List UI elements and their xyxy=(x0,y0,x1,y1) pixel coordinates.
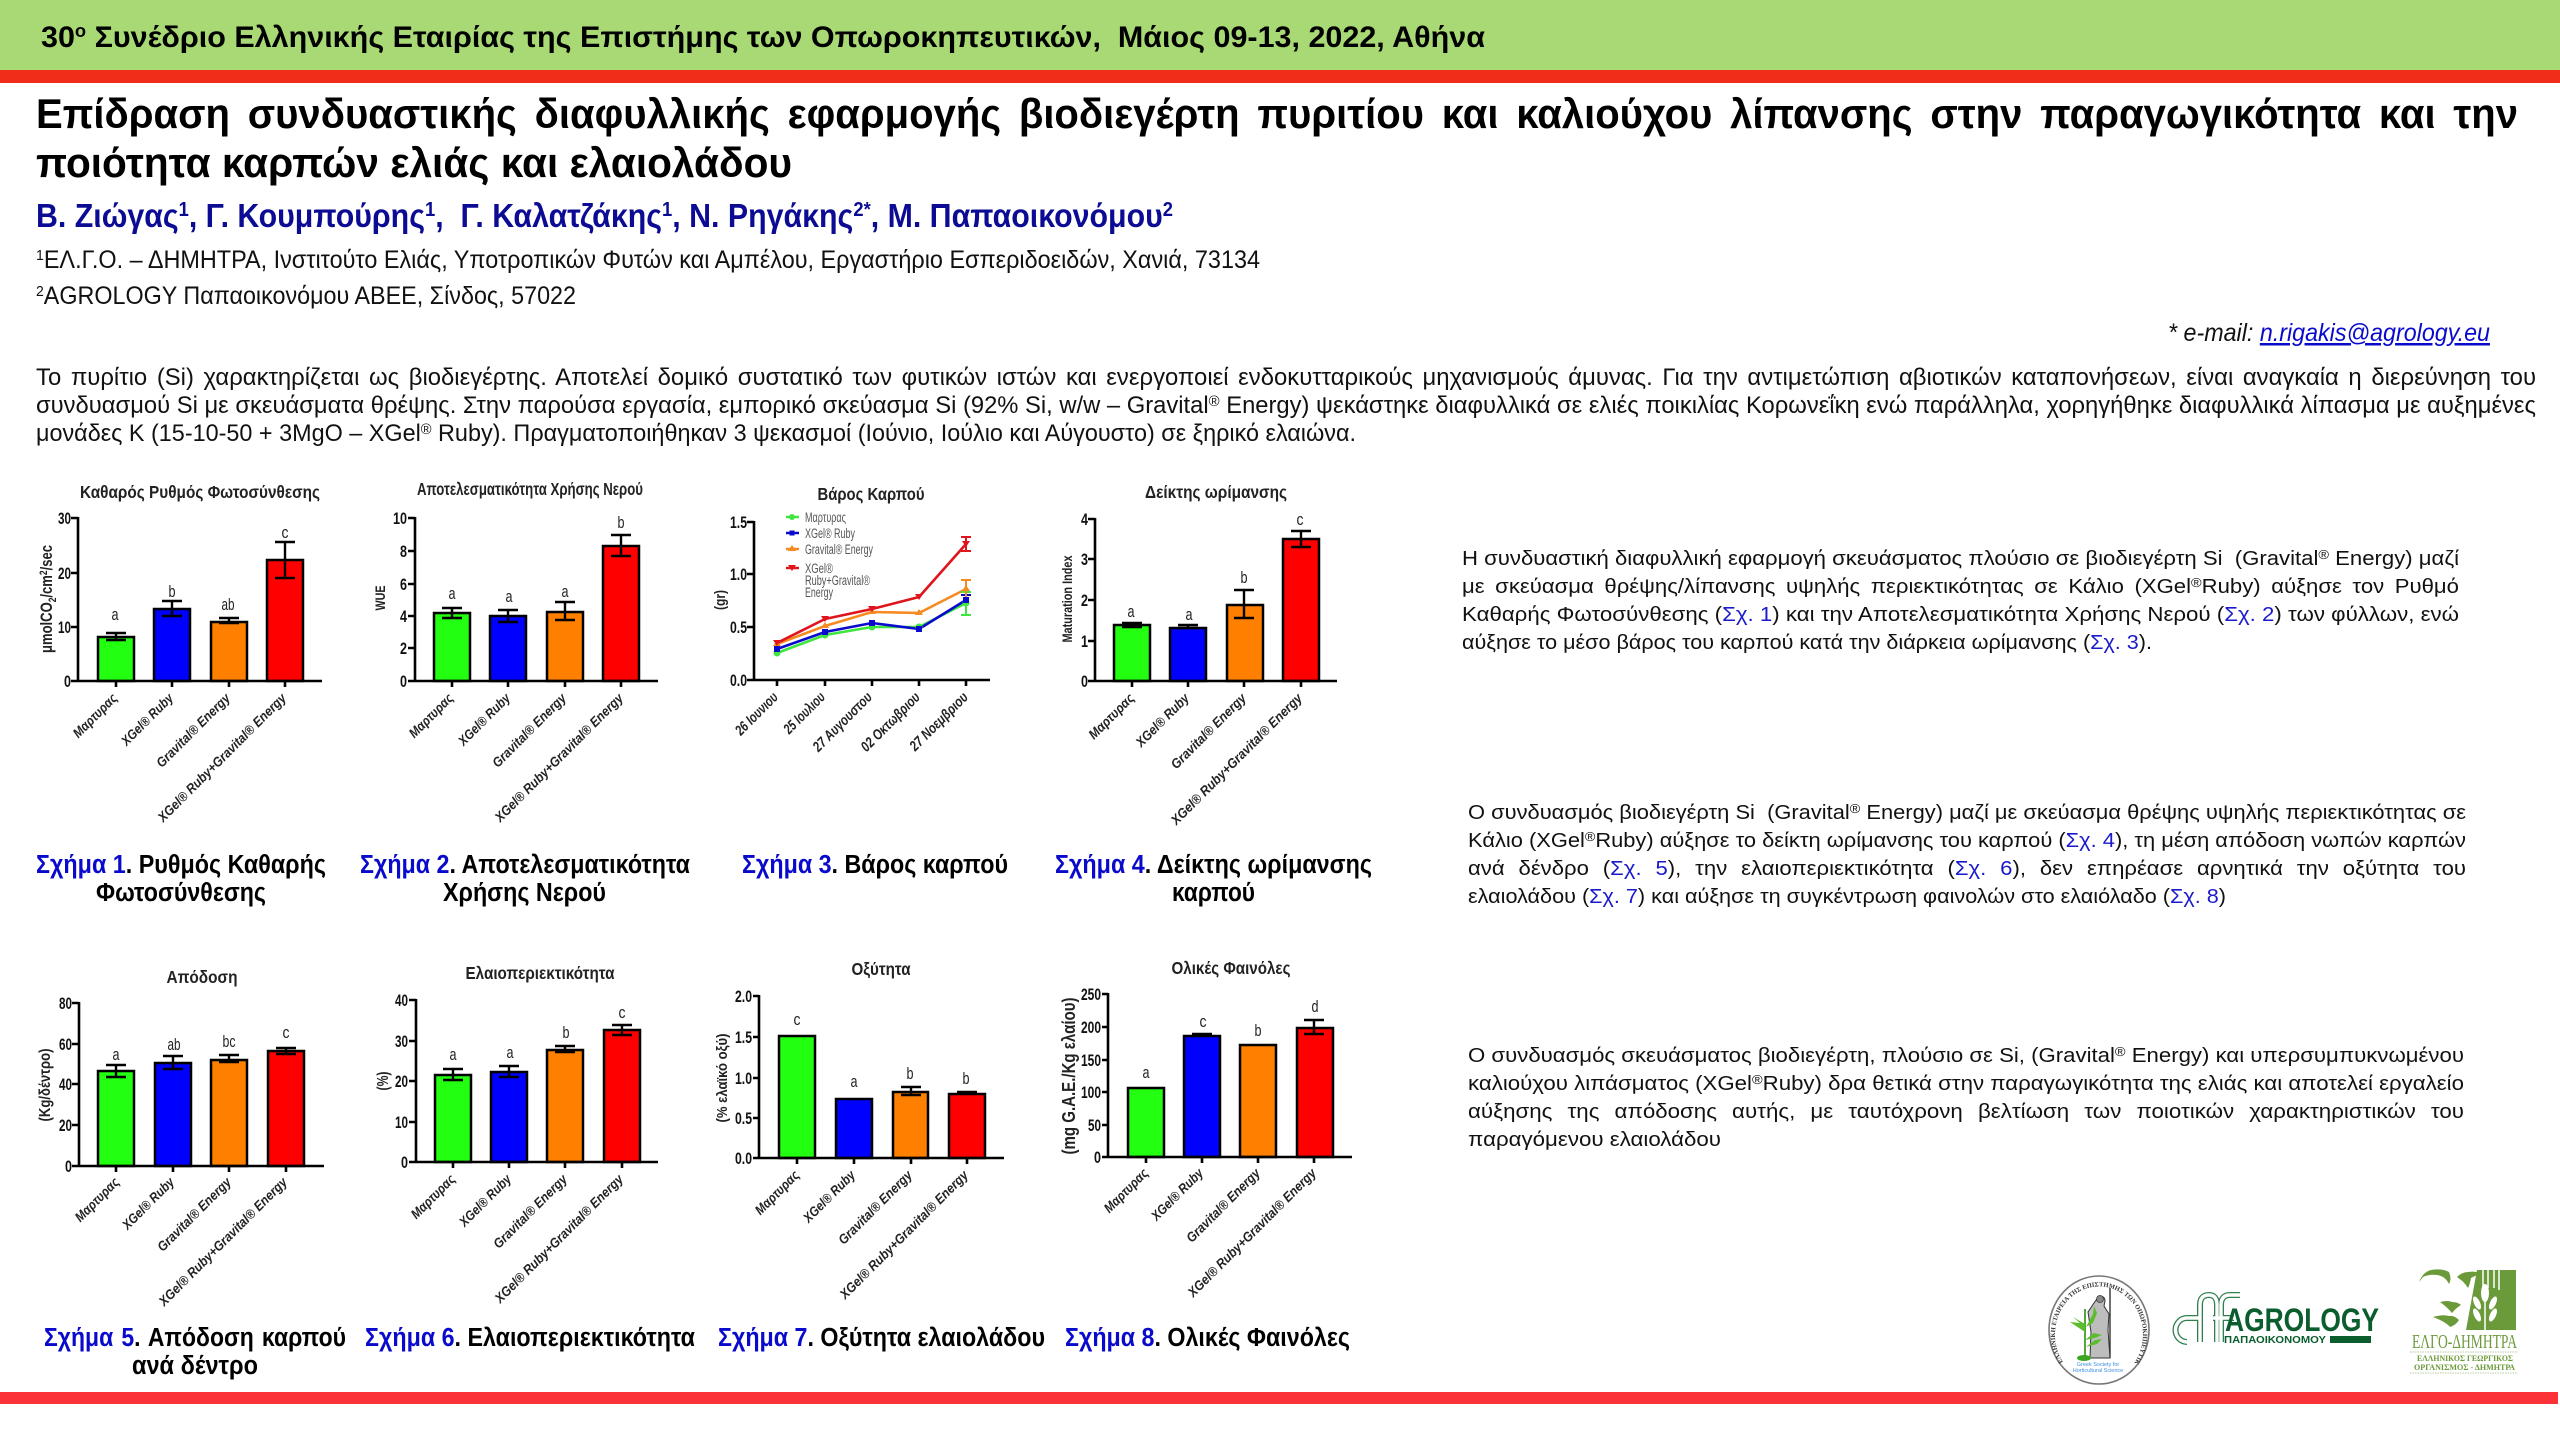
error bars xyxy=(961,537,971,615)
abstract text: μονάδες Κ (15-10-50 + 3MgO – XGel xyxy=(36,420,431,447)
x axis labels: XGel® Ruby xyxy=(456,1171,515,1230)
chart 1: net photosynthesis xyxy=(37,482,322,825)
conclusion paragraph: ® xyxy=(1752,1072,1763,1087)
results paragraph 1: με σκεύασμα θρέψης/λίπανσης υψηλής περιεκτικότητας σε Κάλιο (XGel xyxy=(1462,576,2121,598)
error bars xyxy=(1122,531,1311,628)
authors: Β. Ζιώγας xyxy=(36,197,191,234)
abstract text: ® xyxy=(421,421,432,438)
results paragraph 2: Ruby) αύξησε το δείκτη ωρίμανσης του καρπού ( xyxy=(1595,830,2066,852)
logo: ELGO-Dimitra: ΟΡΓΑΝΙΣΜΟΣ - ΔΗΜΗΤΡΑ xyxy=(2414,1362,2516,1372)
y tick labels: 20 xyxy=(58,565,71,583)
y tick labels: 0 xyxy=(65,1158,72,1176)
x axis labels: Gravital® Energy xyxy=(835,1167,916,1247)
legend: Ruby+Gravital® xyxy=(805,573,870,588)
bars xyxy=(779,1036,985,1158)
logo: Agrology xyxy=(2176,1295,2379,1346)
results paragraph 1 xyxy=(1462,547,2460,654)
y tick labels: 6 xyxy=(400,576,407,594)
results paragraph 2: ελαιολάδου ( Σχ. 7) και αύξησε τη συγκέντρωση φαινολών στο ελαιόλαδο ( Σχ. 8) xyxy=(1468,886,2226,908)
logo: ELGO-Dimitra xyxy=(2410,1269,2518,1373)
abstract text: Energy) ψεκάστηκε διαφυλλικά σε ελιές ποικιλίας Κορωνεΐκη ενώ παράλληλα, χορηγήθηκε διαφυλλικά λίπασμα με αυξημένες xyxy=(1220,392,2536,419)
significance letters: a xyxy=(506,1043,514,1062)
significance letters: b xyxy=(1254,1021,1262,1040)
y axis label: 2 xyxy=(38,570,50,575)
y tick labels: 1.5 xyxy=(730,514,747,532)
significance letters: bc xyxy=(222,1032,236,1051)
y tick labels: 250 xyxy=(1081,986,1101,1004)
conference heading: Συνέδριο Ελληνικής Εταιρίας της Επιστήμης των Οπωροκηπευτικών, Μάιος 09-13, 2022, Αθήνα xyxy=(86,21,1486,54)
legend: XGel® Ruby xyxy=(805,526,855,541)
caption: figure 1 xyxy=(36,851,326,907)
results paragraph 2: ® xyxy=(1585,829,1596,844)
significance letters: a xyxy=(1128,602,1135,621)
caption: figure 8: Σχήμα 8. Ολικές Φαινόλες xyxy=(1065,1324,1350,1352)
y tick labels: 4 xyxy=(400,608,408,626)
y tick labels: 40 xyxy=(395,992,408,1010)
y axis label: (%) xyxy=(375,1072,392,1090)
significance letters xyxy=(1128,510,1304,624)
y tick labels: 0 xyxy=(1081,673,1088,691)
x axis labels xyxy=(70,690,290,825)
significance letters xyxy=(450,1003,626,1064)
abstract text: Το πυρίτιο (Si) χαρακτηρίζεται ως βιοδιεγέρτης. Αποτελεί δομικό συστατικό των φυτικών ιστών και ενεργοποιεί ενδοκυτταρικούς μηχανισμούς άμυνας. Για την αντιμετώπιση αβιοτικών καταπονήσεων, είναι αναγκαία η διερεύνηση του xyxy=(36,364,2536,391)
conclusion paragraph: αύξησης της απόδοσης αυτής, με ταυτόχρονη βελτίωση των ποιοτικών χαρακτηριστικών του xyxy=(1468,1101,2464,1123)
authors: , Ν. Ρηγάκης xyxy=(672,197,853,234)
affiliations: AGROLOGY Παπαοικονόμου ΑΒΕΕ, Σίνδος, 57022 xyxy=(44,282,576,310)
significance letters: b xyxy=(618,513,624,532)
authors: 1 xyxy=(662,199,672,221)
title xyxy=(36,90,2518,186)
chart 2: water use efficiency xyxy=(372,479,658,825)
significance letters: c xyxy=(1296,510,1304,529)
chart 5: yield xyxy=(37,967,324,1309)
chart title: Οξύτητα xyxy=(852,959,911,980)
y tick labels: 100 xyxy=(1081,1084,1101,1102)
x axis labels: Gravital® Energy xyxy=(1183,1165,1264,1245)
y tick labels xyxy=(395,992,408,1172)
axes xyxy=(1102,993,1352,1163)
caption: figure 5 xyxy=(44,1324,346,1380)
caption: figure 4: καρπού xyxy=(1172,879,1255,907)
x axis labels xyxy=(72,1174,291,1309)
x axis labels: Μαρτυρας xyxy=(406,690,457,741)
chart 8: total phenols xyxy=(1059,958,1352,1300)
y tick labels: 20 xyxy=(59,1117,72,1135)
header band xyxy=(0,0,2560,83)
legend xyxy=(786,510,873,600)
x axis labels: XGel® Ruby+Gravital® Energy xyxy=(1167,690,1306,828)
y tick labels: 2 xyxy=(400,640,407,658)
y tick labels: 8 xyxy=(400,543,407,561)
error bars xyxy=(443,1025,632,1080)
y tick labels: 0 xyxy=(1094,1149,1101,1167)
x axis labels: XGel® Ruby xyxy=(1132,690,1193,751)
caption: figure 2 xyxy=(360,851,690,907)
significance letters: a xyxy=(1142,1063,1150,1082)
x axis labels: XGel® Ruby xyxy=(119,1174,178,1233)
significance letters: c xyxy=(282,1023,290,1042)
y tick labels: 80 xyxy=(59,995,72,1013)
conclusion paragraph: καλιούχου λιπάσματος (XGel xyxy=(1468,1073,1723,1095)
y tick labels: 10 xyxy=(58,619,71,637)
abstract text: ® xyxy=(1209,393,1220,410)
y tick labels: 150 xyxy=(1081,1052,1101,1070)
y tick labels: 1.0 xyxy=(735,1070,752,1088)
axes xyxy=(747,521,990,686)
caption: figure 1: Σχήμα 1. Ρυθμός Καθαρής xyxy=(36,851,326,879)
affiliations xyxy=(36,246,1260,310)
results paragraph 2: ® xyxy=(1850,801,1861,816)
x axis labels: 26 Ιουνιου xyxy=(732,690,782,740)
bars xyxy=(1128,1028,1333,1157)
y tick labels: 0.5 xyxy=(730,619,747,637)
x axis labels xyxy=(1086,690,1306,828)
y tick labels xyxy=(1081,511,1089,691)
authors: 2 xyxy=(1163,199,1173,221)
results paragraph 2: Ο συνδυασμός βιοδιεγέρτη Si (Gravital xyxy=(1468,802,1817,824)
affiliations: ΕΛ.Γ.Ο. – ΔΗΜΗΤΡΑ, Ινστιτούτο Ελιάς, Υποτροπικών Φυτών και Αμπέλου, Εργαστήριο Εσπεριδοειδών, Χανιά, 73134 xyxy=(44,246,1260,274)
axes xyxy=(753,995,1004,1164)
chart title: Ολικές Φαινόλες xyxy=(1172,958,1290,978)
x axis labels: XGel® Ruby xyxy=(455,690,514,749)
x axis labels: Gravital® Energy xyxy=(1168,690,1250,772)
bars xyxy=(98,560,303,681)
legend: Energy xyxy=(805,585,833,600)
conclusion paragraph xyxy=(1468,1044,2464,1151)
y tick labels xyxy=(1081,986,1101,1167)
error bars xyxy=(106,542,295,640)
x axis labels: 25 Ιουλιου xyxy=(780,690,829,738)
bars xyxy=(98,1051,304,1166)
y tick labels: 30 xyxy=(58,510,71,528)
x axis labels: Μαρτυρας xyxy=(752,1167,803,1218)
x axis labels: Gravital® Energy xyxy=(153,690,234,770)
caption: figure 1: Φωτοσύνθεσης xyxy=(96,879,266,907)
results paragraph 1: αύξησε το μέσο βάρος του καρπού κατά την διάρκεια ωρίμανσης ( Σχ. 3). xyxy=(1462,632,2152,654)
y tick labels: 0 xyxy=(400,673,407,691)
chart title: Δείκτης ωρίμανσης xyxy=(1145,482,1287,502)
y tick labels: 0.0 xyxy=(730,672,747,690)
y axis label: Maturation Index xyxy=(1059,555,1075,642)
caption: figure 2: Χρήσης Νερού xyxy=(443,879,606,907)
significance letters: b xyxy=(962,1069,970,1088)
error bars xyxy=(442,535,631,622)
y tick labels: 0 xyxy=(401,1154,408,1172)
y tick labels: 3 xyxy=(1081,551,1088,569)
error bars xyxy=(1192,1020,1324,1036)
caption: figure 3: Σχήμα 3. Βάρος καρπού xyxy=(742,851,1008,879)
logo: Agrology: ΠΑΠΑΟΙΚΟΝΟΜΟΥ xyxy=(2224,1335,2326,1346)
logo: Greek Society for Horticultural Science: Greek Society for xyxy=(2077,1362,2119,1368)
logo: Greek Society for Horticultural Science: ΕΛΛΗΝΙΚΗ ΕΤΑΙΡΕΙΑ ΤΗΣ ΕΠΙΣΤΗΜΗΣ ΤΩΝ ΟΠΩΡΟΚΗΠΕΥΤΙΚΩΝ xyxy=(2050,1282,2148,1366)
results paragraph 2: ανά δένδρο ( Σχ. 5 ), την ελαιοπεριεκτικότητα ( Σχ. 6 ), δεν επηρέασε αρνητικά την οξύτητα του xyxy=(1468,858,2466,880)
error bars xyxy=(901,1087,977,1095)
x axis labels xyxy=(732,690,972,756)
x axis labels: Gravital® Energy xyxy=(154,1174,235,1254)
significance letters: ab xyxy=(222,595,234,614)
y tick labels: 1 xyxy=(1081,633,1088,651)
results paragraph 1: ® xyxy=(2318,547,2329,562)
x axis labels: Μαρτυρας xyxy=(70,690,121,741)
chart title: Απόδοση xyxy=(166,967,238,987)
x axis labels xyxy=(1101,1165,1320,1300)
chart 4: maturation index xyxy=(1059,482,1337,828)
conference heading: ο xyxy=(75,21,86,41)
caption: figure 4: Σχήμα 4. Δείκτης ωρίμανσης xyxy=(1055,851,1372,879)
x axis labels: XGel® Ruby+Gravital® Energy xyxy=(491,1171,627,1306)
significance letters: a xyxy=(450,1045,457,1064)
y axis label: 2 xyxy=(47,598,59,602)
caption: figure 2: Σχήμα 2. Αποτελεσματικότητα xyxy=(360,851,690,879)
caption: figure 5: ανά δέντρο xyxy=(132,1352,258,1380)
y tick labels: 50 xyxy=(1088,1117,1101,1135)
legend: Gravital® Energy xyxy=(805,542,873,557)
significance letters: a xyxy=(112,605,119,624)
y tick labels: 60 xyxy=(59,1036,72,1054)
y tick labels: 2 xyxy=(1081,592,1088,610)
abstract text: Ruby). Πραγματοποιήθηκαν 3 ψεκασμοί (Ιούνιο, Ιούλιο και Αύγουστο) σε ξηρικό ελαιώνα. xyxy=(432,420,1356,447)
x axis labels xyxy=(752,1167,972,1302)
y tick labels: 4 xyxy=(1081,511,1089,529)
y axis label: WUE xyxy=(372,586,388,610)
results paragraph 1: ® xyxy=(2191,575,2202,590)
x axis labels: XGel® Ruby xyxy=(118,690,177,749)
chart 6: oil content xyxy=(375,963,658,1306)
results paragraph 1: Energy) μαζί xyxy=(2329,548,2460,570)
results paragraph 2: Κάλιο (XGel xyxy=(1468,830,1575,852)
caption: figure 5: Σχήμα 5. Απόδοση καρπού xyxy=(44,1324,346,1352)
significance letters: d xyxy=(1312,997,1318,1016)
conclusion paragraph: Ruby) δρα θετικά στην παραγωγικότητα της ελιάς και αποτελεί εργαλείο xyxy=(1763,1073,2464,1095)
x axis labels: XGel® Ruby+Gravital® Energy xyxy=(836,1167,972,1302)
logo: ELGO-Dimitra: ΕΛΛΗΝΙΚΟΣ ΓΕΩΡΓΙΚΟΣ xyxy=(2417,1353,2513,1363)
significance letters: b xyxy=(906,1064,914,1083)
significance letters: a xyxy=(562,582,569,601)
legend: XGel® xyxy=(805,561,833,576)
results paragraph 1: Η συνδυαστική διαφυλλική εφαρμογή σκευάσματος πλούσιο σε βιοδιεγέρτη Si (Gravital xyxy=(1462,548,2236,570)
caption: figure 4 xyxy=(1055,851,1372,907)
axes xyxy=(1088,518,1337,687)
chart title: Ελαιοπεριεκτικότητα xyxy=(466,963,615,983)
y tick labels: 2.0 xyxy=(735,988,752,1006)
results paragraph 2: Σχ. 4), τη μέση απόδοση νωπών καρπών xyxy=(2066,830,2436,852)
y tick labels: 1.5 xyxy=(735,1029,752,1047)
y tick labels xyxy=(730,514,747,690)
y axis label: /cm xyxy=(37,575,56,598)
x axis labels: XGel® Ruby+Gravital® Energy xyxy=(1184,1165,1320,1300)
y axis label: (gr) xyxy=(712,590,729,610)
x axis labels: Gravital® Energy xyxy=(490,1171,571,1251)
conclusion paragraph: ® xyxy=(2115,1044,2126,1059)
y tick labels: 0 xyxy=(64,673,71,691)
y axis label: μmolCO xyxy=(37,587,56,653)
markers xyxy=(773,541,970,656)
chart 7: acidity xyxy=(714,959,1004,1302)
conclusion paragraph: παραγόμενου ελαιολάδου xyxy=(1468,1129,1721,1151)
x axis labels: Gravital® Energy xyxy=(489,690,570,770)
caption: figure 6: Σχήμα 6. Ελαιοπεριεκτικότητα xyxy=(365,1324,695,1352)
x axis labels: Μαρτυρας xyxy=(1101,1165,1152,1216)
y tick labels xyxy=(735,988,752,1168)
results paragraph 1: Ruby) αύξησε τον Ρυθμό xyxy=(2202,576,2459,598)
x axis labels: XGel® Ruby xyxy=(1148,1165,1207,1224)
logo: Greek Society for Horticultural Science: Horticultural Science xyxy=(2073,1368,2123,1374)
authors: , Μ. Παπαοικονόμου xyxy=(871,197,1163,234)
y axis label: (mg G.A.E./Kg ελαίου) xyxy=(1059,998,1079,1154)
axes xyxy=(409,999,658,1168)
significance letters xyxy=(112,1023,290,1064)
bars xyxy=(1114,539,1319,681)
significance letters: a xyxy=(448,584,456,603)
authors: 1 xyxy=(179,199,189,221)
error bars xyxy=(106,1048,296,1077)
y tick labels: 200 xyxy=(1081,1019,1101,1037)
y tick labels: 40 xyxy=(59,1076,72,1094)
significance letters xyxy=(794,1010,970,1091)
bars xyxy=(435,1030,640,1162)
significance letters: a xyxy=(1186,605,1193,624)
x axis labels: XGel® Ruby+Gravital® Energy xyxy=(491,690,627,825)
conference heading: 30 xyxy=(41,21,74,54)
significance letters: c xyxy=(282,523,289,542)
y axis label: (% ελαϊκό οξύ) xyxy=(714,1034,731,1122)
significance letters: a xyxy=(506,587,513,606)
significance letters: c xyxy=(618,1003,626,1022)
abstract text: συνδυασμού Si με σκευάσματα θρέψης. Στην παρούσα εργασία, εμπορικό σκεύασμα Si (92% Si, w/w – Gravital xyxy=(36,392,1220,419)
x axis labels xyxy=(406,690,627,825)
axes xyxy=(408,517,658,687)
conclusion paragraph: Energy) και υπερσυμπυκνωμένου xyxy=(2126,1045,2464,1067)
significance letters: b xyxy=(168,582,176,601)
abstract text xyxy=(36,364,2536,447)
significance letters: b xyxy=(562,1023,570,1042)
results paragraph 2: Energy) μαζί με σκεύασμα θρέψης υψηλής περιεκτικότητας σε xyxy=(1860,802,2466,824)
affiliations: 2 xyxy=(36,283,44,300)
series lines xyxy=(777,544,966,653)
significance letters xyxy=(448,513,624,606)
x axis labels: Μαρτυρας xyxy=(408,1171,459,1222)
chart 3: fruit weight line chart xyxy=(712,484,990,756)
conclusion paragraph: Ο συνδυασμός σκευάσματος βιοδιεγέρτη, πλούσιο σε Si, (Gravital xyxy=(1468,1045,2051,1067)
y tick labels: 10 xyxy=(393,510,407,528)
legend: Μαρτυρας xyxy=(805,510,846,525)
x axis labels: 27 Νοεμβριου xyxy=(906,690,972,755)
authors: 2* xyxy=(853,199,871,221)
y tick labels xyxy=(58,510,71,691)
significance letters xyxy=(112,523,289,624)
authors: 1 xyxy=(425,199,435,221)
significance letters: ab xyxy=(168,1035,180,1054)
y axis label: /sec xyxy=(37,545,56,570)
caption: figure 7: Σχήμα 7. Οξύτητα ελαιολάδου xyxy=(718,1324,1045,1352)
title: ποιότητα καρπών ελιάς και ελαιολάδου xyxy=(36,139,792,186)
x axis labels xyxy=(408,1171,627,1306)
x axis labels: XGel® Ruby+Gravital® Energy xyxy=(155,1174,291,1309)
y axis label: (Kg/δέντρο) xyxy=(37,1048,54,1122)
y tick labels: 0.0 xyxy=(735,1150,752,1168)
chart title: Καθαρός Ρυθμός Φωτοσύνθεσης xyxy=(80,482,320,502)
significance letters xyxy=(1142,997,1318,1082)
y tick labels: 20 xyxy=(395,1073,408,1091)
bars xyxy=(434,546,639,681)
affiliations: 1 xyxy=(36,247,44,264)
logo: Agrology: AGROLOGY xyxy=(2225,1302,2379,1338)
results paragraph 2 xyxy=(1468,801,2466,908)
y tick labels: 10 xyxy=(395,1114,408,1132)
x axis labels: XGel® Ruby xyxy=(800,1167,859,1226)
y tick labels xyxy=(393,510,408,691)
x axis labels: Μαρτυρας xyxy=(72,1174,123,1225)
footer red band xyxy=(0,1392,2558,1404)
significance letters: a xyxy=(850,1072,858,1091)
axes xyxy=(71,517,322,687)
significance letters: c xyxy=(1200,1012,1207,1031)
y tick labels xyxy=(59,995,72,1176)
authors: , Γ. Κουμπούρης xyxy=(189,197,425,234)
x axis labels: 27 Αυγουστου xyxy=(810,690,876,756)
chart title: Αποτελεσματικότητα Χρήσης Νερού xyxy=(417,479,643,499)
chart title: Βάρος Καρπού xyxy=(818,484,924,504)
e-mail: * e-mail: n.rigakis@agrology.eu xyxy=(2168,319,2490,347)
authors: , Γ. Καλατζάκης xyxy=(435,197,662,234)
x axis labels: 02 Οκτωβριου xyxy=(858,690,924,755)
significance letters: a xyxy=(112,1045,120,1064)
axes xyxy=(72,1002,324,1172)
y tick labels: 0.5 xyxy=(735,1110,752,1128)
significance letters: c xyxy=(794,1010,801,1029)
y tick labels: 30 xyxy=(395,1033,408,1051)
results paragraph 1: Καθαρής Φωτοσύνθεσης ( Σχ. 1 ) και την Αποτελεσματικότητα Χρήσης Νερού ( Σχ. 2 ) των φύλλων, ενώ xyxy=(1462,604,2459,626)
y tick labels: 1.0 xyxy=(730,566,747,584)
x axis labels: Μαρτυρας xyxy=(1086,690,1138,742)
significance letters: b xyxy=(1240,568,1248,587)
x axis labels: XGel® Ruby+Gravital® Energy xyxy=(154,690,290,825)
